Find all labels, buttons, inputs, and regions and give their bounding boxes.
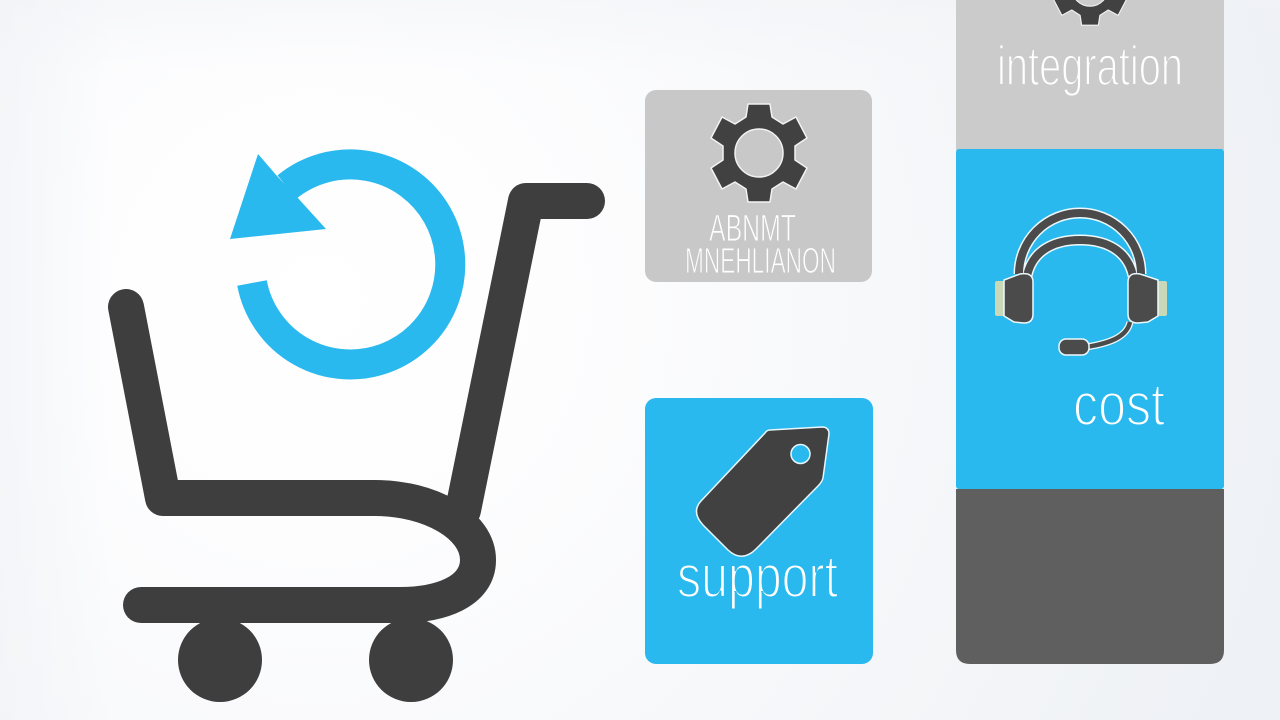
panel: support card (645, 398, 873, 664)
segment: cost (956, 149, 1224, 489)
icon: return arrow (230, 154, 450, 364)
label: cost: cost (1073, 371, 1165, 438)
segment: dark base (956, 489, 1224, 664)
garbled card label: MNEHLIANON (685, 240, 836, 281)
icon: cropped gear (1054, 0, 1126, 25)
garbled card label: ABNMT (709, 208, 796, 250)
icon: price tag (696, 427, 829, 556)
icon: gear (711, 104, 807, 202)
icon: shopping cart (126, 201, 587, 702)
label: support: support (677, 543, 838, 610)
label: integration: integration (997, 34, 1183, 97)
panel: tall column (956, 0, 1224, 664)
icon: headset (995, 213, 1167, 355)
garbled card label (685, 208, 836, 281)
segment: integration (956, 0, 1224, 150)
panel: gear card (645, 90, 872, 282)
